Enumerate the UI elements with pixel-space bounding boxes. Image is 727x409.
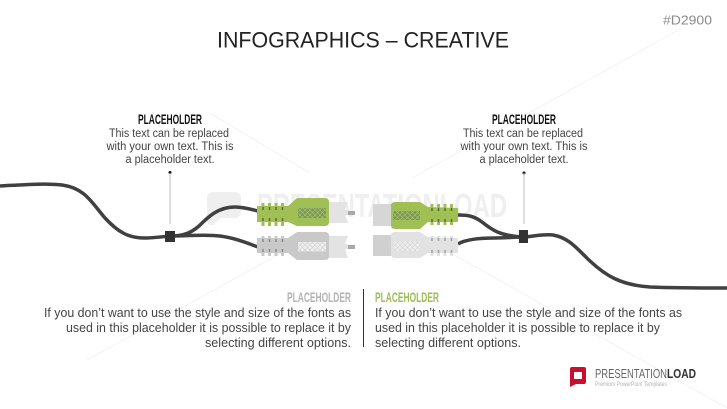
callout: right: PLACEHOLDER (492, 111, 556, 127)
callout: left: This text can be replaced (109, 128, 229, 140)
text block: left: PLACEHOLDER (287, 289, 351, 305)
callout: left: PLACEHOLDER (138, 111, 202, 127)
logo: PRESENTATION (595, 366, 667, 381)
text block: left: selecting different options. (205, 336, 351, 350)
text block: left: used in this placeholder it is possible to replace it by (66, 321, 352, 335)
code label: #D2900 (663, 12, 712, 28)
title: INFOGRAPHICS – CREATIVE (217, 28, 509, 52)
watermark (207, 187, 507, 225)
logo: Premium PowerPoint Templates (595, 382, 667, 388)
watermark: PRESENTATIONLOAD (257, 187, 507, 224)
text block: left (44, 289, 352, 350)
callout: left (106, 111, 234, 224)
text block: right (375, 289, 682, 350)
text block: left: If you don’t want to use the style and size of the fonts as (44, 306, 351, 320)
text block: right: used in this placeholder it is possible to replace it by (375, 321, 661, 335)
plug: right gray (373, 232, 458, 258)
right cable (458, 215, 727, 288)
logo: LOAD (667, 366, 696, 381)
divider (363, 289, 364, 347)
plug: left green (257, 198, 355, 226)
left cable (0, 184, 258, 247)
text block: right: If you don’t want to use the style and size of the fonts as (375, 306, 682, 320)
text block: right: selecting different options. (375, 336, 521, 350)
callout: right (460, 111, 588, 224)
callout: left: with your own text. This is (106, 141, 234, 153)
plug: right green (373, 202, 458, 229)
callout: right: a placeholder text. (480, 154, 568, 166)
callout: right: This text can be replaced (463, 128, 583, 140)
text block: right: PLACEHOLDER (375, 289, 439, 305)
callout: left: a placeholder text. (126, 154, 214, 166)
callout: right: with your own text. This is (460, 141, 588, 153)
plug: left gray (257, 232, 355, 260)
logo (570, 366, 696, 388)
